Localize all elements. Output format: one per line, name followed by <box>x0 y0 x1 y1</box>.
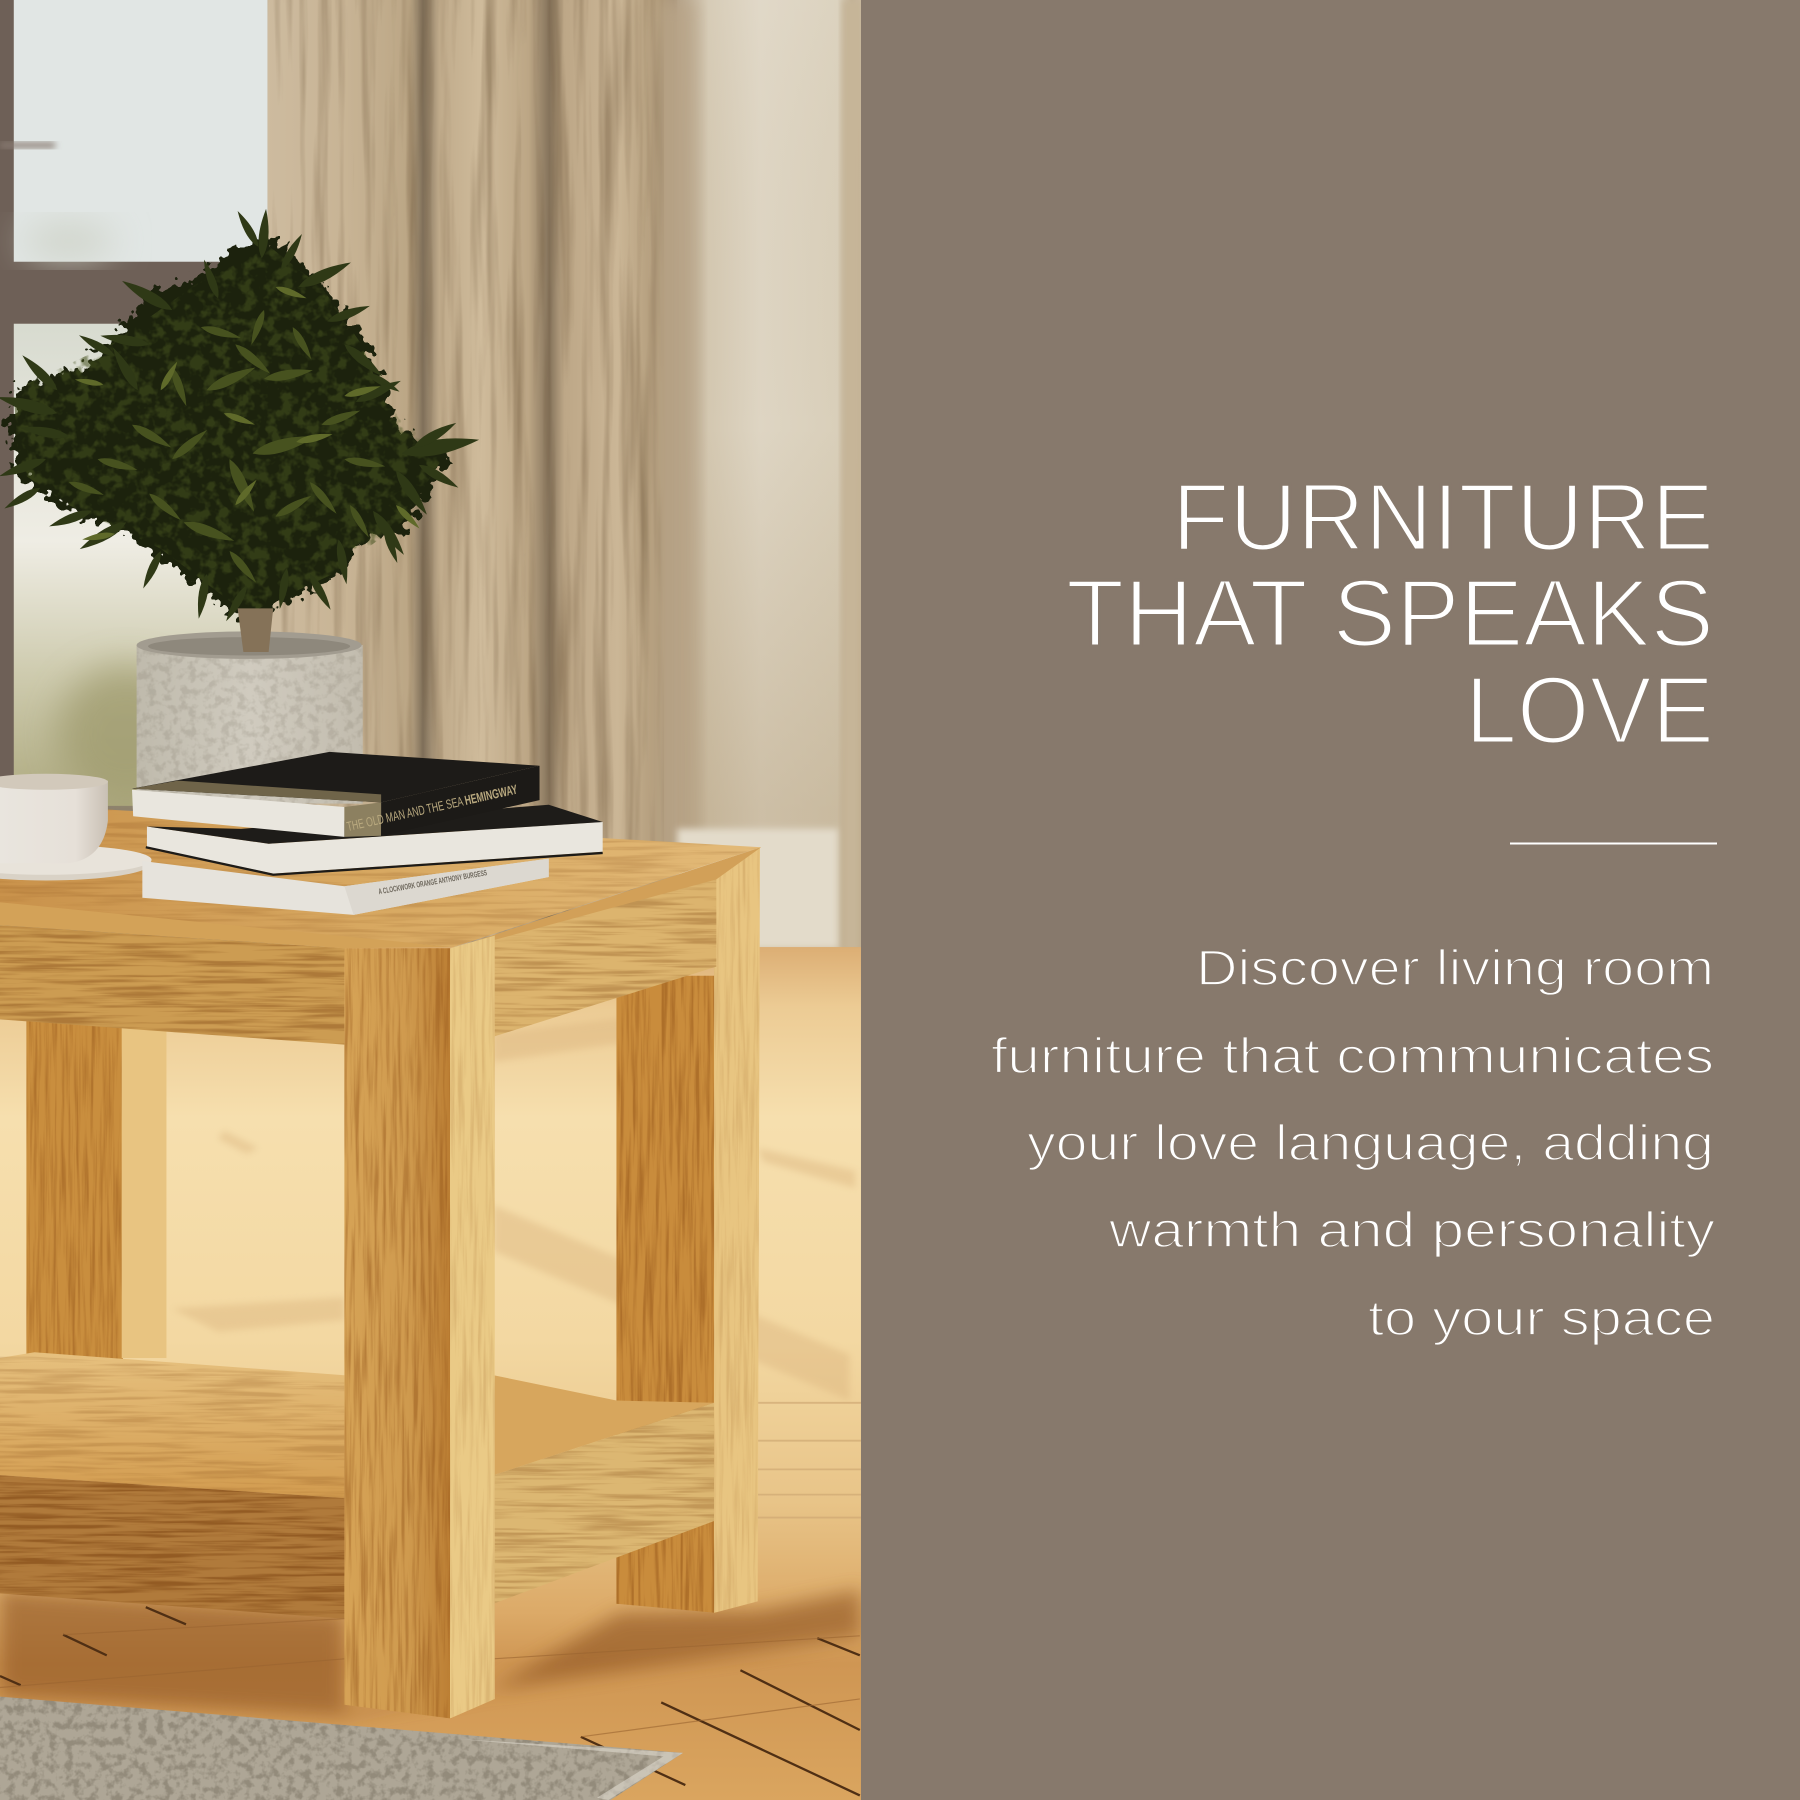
background wall and curtain <box>267 0 861 953</box>
stack of books <box>132 752 603 915</box>
body text: furniture that communicates <box>991 1028 1714 1084</box>
divider rule <box>1510 842 1717 844</box>
body text: your love language, adding <box>1027 1115 1714 1171</box>
leaves <box>0 208 480 623</box>
floor <box>0 947 861 1800</box>
heading: FURNITURE <box>1172 464 1714 571</box>
lower shelf <box>0 1352 714 1619</box>
aprons <box>0 847 761 1045</box>
coffee cup and saucer <box>0 774 152 880</box>
back-right leg <box>616 847 760 1613</box>
table top surface <box>0 809 761 947</box>
plant pot <box>137 608 363 804</box>
window <box>0 0 267 806</box>
table <box>0 809 761 1718</box>
body text <box>991 940 1715 1346</box>
heading: THAT SPEAKS <box>1066 560 1714 667</box>
middle book <box>146 805 603 875</box>
foliage mass <box>7 235 450 626</box>
body text: warmth and personality <box>1108 1202 1715 1258</box>
panel: text background <box>861 0 1800 1800</box>
body text: Discover living room <box>1196 940 1714 996</box>
top book: The Old Man and the Sea: THE OLD MAN AND THE SEA HEMINGWAY <box>345 782 519 834</box>
bottom book: A Clockwork Orange <box>142 859 549 915</box>
top book: The Old Man and the Sea <box>132 752 540 837</box>
bottom book: A Clockwork Orange: A CLOCKWORK ORANGE ANTHONY BURGESS <box>378 868 488 896</box>
front leg <box>344 936 495 1718</box>
body text: to your space <box>1368 1290 1715 1346</box>
panel: room photograph <box>0 0 861 1800</box>
heading <box>1066 464 1714 764</box>
back-left leg <box>26 1016 166 1364</box>
foliage tone <box>14 247 442 614</box>
heading: LOVE <box>1465 657 1714 764</box>
plant <box>0 208 480 626</box>
rug <box>0 1697 683 1800</box>
